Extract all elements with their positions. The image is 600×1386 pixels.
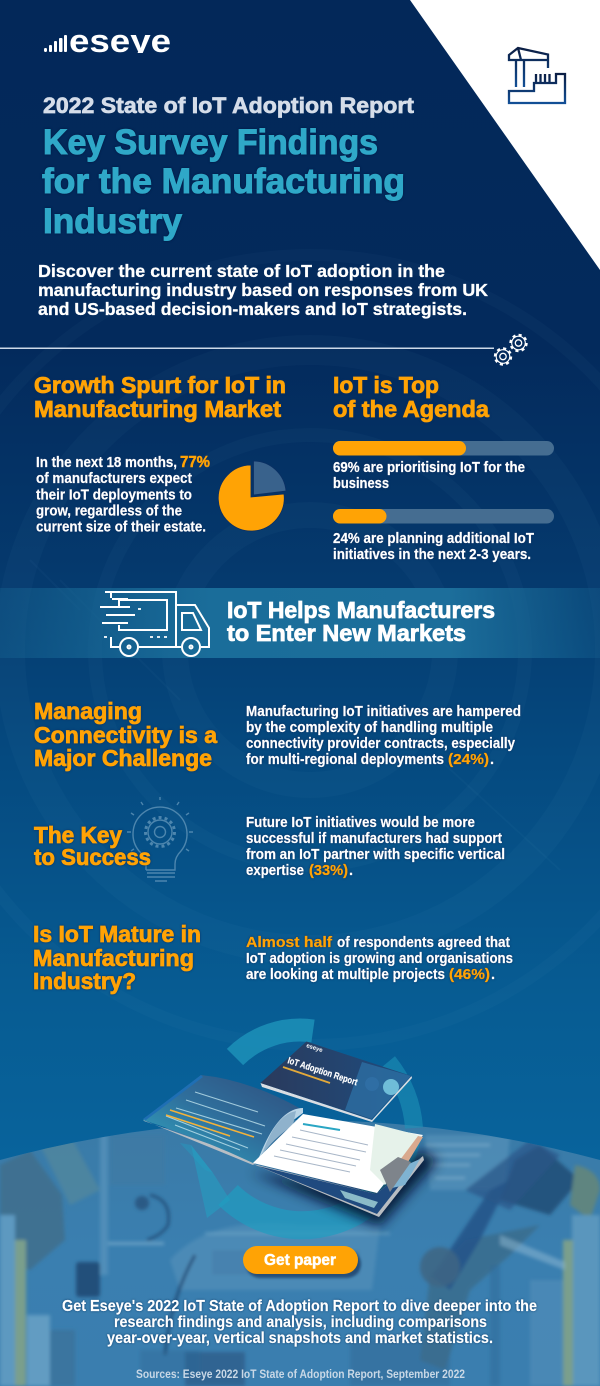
- panel: top of the agenda: [333, 372, 554, 563]
- text block: successful if manufacturers had support: [246, 831, 502, 847]
- closing text: research findings and analysis, including comparisons: [114, 1314, 487, 1331]
- button: Get paper: [264, 1252, 336, 1269]
- text block: expertise: [246, 863, 304, 879]
- icon: light bulb with gear: [127, 797, 193, 881]
- left robot arm: [0, 1150, 65, 1270]
- subtitle: 2022 State of IoT Adoption Report: [43, 93, 415, 118]
- text block: (24%): [448, 752, 489, 768]
- bar: 24 percent: 24% are planning additional IoT: [333, 531, 534, 547]
- text block: Almost half: [246, 935, 332, 951]
- heading: Manufacturing Market: [34, 396, 281, 422]
- text block: for multi-regional deployments: [246, 752, 444, 768]
- left column: [0, 1215, 15, 1386]
- text block: (33%): [309, 863, 348, 879]
- heading: [34, 698, 217, 771]
- icon: factory crane: [509, 48, 565, 103]
- icon: gears: [495, 335, 526, 364]
- bar: 69 percent: [333, 441, 554, 492]
- intro text: and US-based decision-makers and IoT strategists.: [38, 299, 467, 319]
- text block: .: [349, 863, 353, 879]
- main title: [42, 123, 405, 241]
- shadow: [250, 1150, 438, 1226]
- text block: [36, 454, 210, 536]
- bar: 69 percent: 69% are prioritising IoT for the: [333, 460, 525, 476]
- icon: truck: [100, 592, 209, 656]
- title block: [42, 93, 415, 241]
- heading: Industry?: [33, 968, 136, 994]
- text block: from an IoT partner with specific vertical: [246, 847, 505, 863]
- text block: their IoT deployments to: [36, 488, 192, 504]
- main title: Key Survey Findings: [43, 123, 378, 162]
- factory photo background: [0, 1110, 600, 1386]
- cover title: IoT Adoption Report: [286, 1055, 360, 1089]
- text block: [246, 935, 513, 983]
- cyan ring: [180, 1030, 414, 1225]
- text block: 77%: [180, 454, 210, 471]
- intro text: [38, 261, 488, 319]
- cover logo: eseye: [305, 1043, 324, 1054]
- bar: 24 percent: initiatives in the next 2-3 years.: [333, 547, 531, 563]
- sources: Sources: Eseye 2022 IoT State of Adoption Report, September 2022: [136, 1369, 465, 1381]
- heading: [333, 372, 489, 422]
- heading: [34, 372, 286, 422]
- intro text: Discover the current state of IoT adoption in the: [38, 261, 445, 281]
- main title: for the Manufacturing: [42, 162, 405, 201]
- main title: Industry: [43, 202, 183, 241]
- panel: maturity: [33, 921, 513, 994]
- heading: Growth Spurt for IoT in: [34, 372, 286, 398]
- text block: IoT adoption is growing and organisations: [246, 951, 513, 967]
- cover booklet: [260, 1042, 412, 1122]
- panel: key to success: [34, 797, 505, 881]
- text block: Future IoT initiatives would be more: [246, 815, 475, 831]
- button: [243, 1246, 361, 1278]
- report mockup: [143, 1030, 438, 1278]
- text block: .: [490, 752, 494, 768]
- heading: [34, 822, 151, 870]
- text block: of manufacturers expect: [36, 471, 192, 487]
- heading: to Success: [34, 844, 151, 870]
- banner heading: [227, 597, 495, 646]
- text block: [246, 815, 505, 879]
- header white corner: [410, 0, 600, 270]
- divider with gears: [0, 335, 526, 364]
- banner: new markets: [0, 588, 600, 658]
- right column: [572, 1215, 600, 1386]
- icon: signal bars: [44, 35, 67, 52]
- text block: by the complexity of handling multiple: [246, 720, 493, 736]
- closing text: year-over-year, vertical snapshots and market statistics.: [107, 1330, 493, 1347]
- banner heading: IoT Helps Manufacturers: [227, 597, 495, 623]
- pie chart: [218, 461, 286, 531]
- heading: Manufacturing: [33, 945, 194, 971]
- heading: Major Challenge: [34, 745, 212, 771]
- banner heading: to Enter New Markets: [227, 620, 466, 646]
- heading: Managing: [34, 698, 142, 724]
- text block: are looking at multiple projects: [246, 967, 445, 983]
- open book bottom page: [253, 1156, 424, 1217]
- logo wordmark: eseye: [69, 23, 171, 59]
- heading: IoT is Top: [333, 372, 439, 398]
- right page: [253, 1114, 423, 1193]
- intro text: manufacturing industry based on responses from UK: [38, 280, 488, 300]
- left page: [143, 1075, 303, 1165]
- right stacked rails: [425, 1135, 510, 1190]
- bar: 24 percent: [333, 509, 554, 563]
- center uprights: [100, 1130, 108, 1275]
- heading: Is IoT Mature in: [33, 921, 201, 947]
- heading: The Key: [34, 822, 122, 848]
- text block: of respondents agreed that: [337, 935, 510, 951]
- logo: eseye: [44, 34, 170, 53]
- text block: current size of their estate.: [36, 520, 206, 536]
- closing text: [62, 1298, 537, 1347]
- closing text: Get Eseye's 2022 IoT State of Adoption Report to dive deeper into the: [62, 1298, 537, 1315]
- background tech rings: [0, 255, 600, 1045]
- car shell: [170, 1223, 380, 1290]
- text block: grow, regardless of the: [36, 504, 182, 520]
- text block: [246, 704, 521, 768]
- heading: Connectivity is a: [34, 722, 217, 748]
- text block: Manufacturing IoT initiatives are hampered: [246, 704, 521, 720]
- bar: 69 percent: business: [333, 476, 389, 492]
- text block: In the next 18 months,: [36, 455, 177, 471]
- text block: (46%): [449, 967, 490, 983]
- heading: [33, 921, 201, 994]
- heading: of the Agenda: [333, 396, 489, 422]
- panel: growth spurt: [34, 372, 286, 536]
- panel: connectivity challenge: [34, 698, 521, 771]
- text block: .: [491, 967, 495, 983]
- text block: connectivity provider contracts, especially: [246, 736, 515, 752]
- right robot arm: [420, 1225, 540, 1370]
